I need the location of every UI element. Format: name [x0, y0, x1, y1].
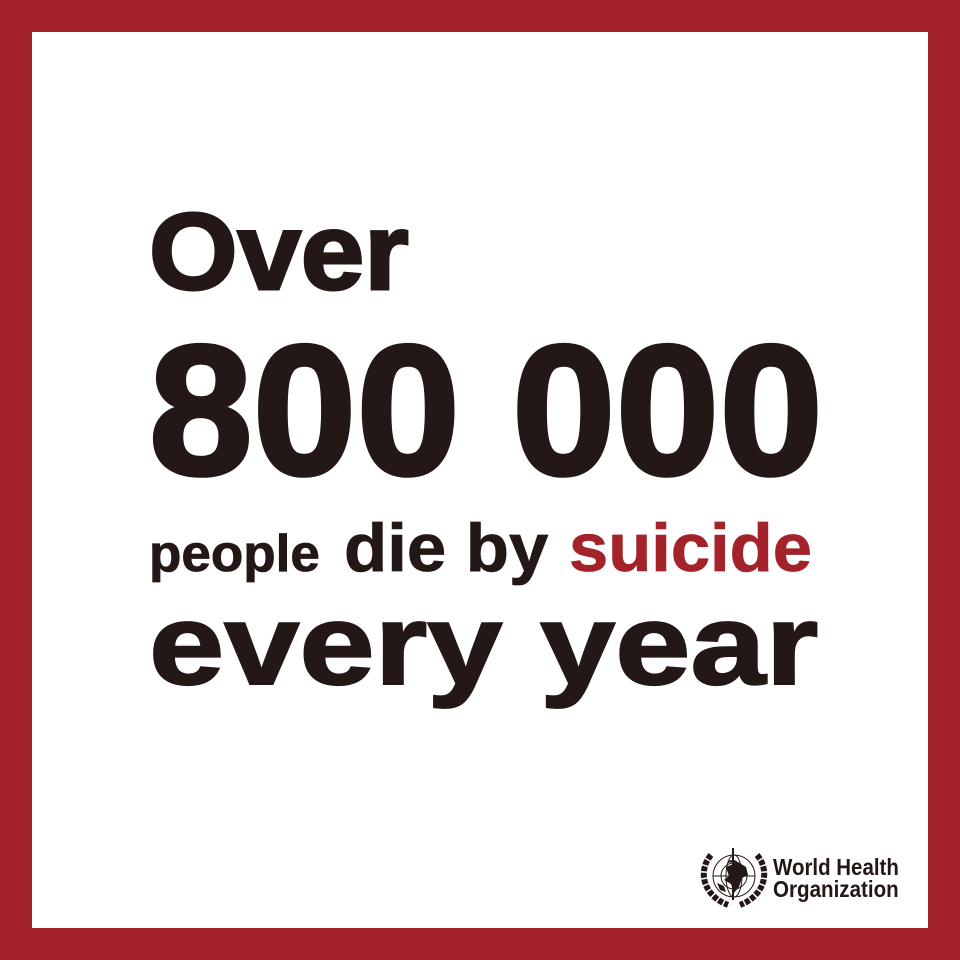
continents: [717, 862, 748, 893]
text: people: people: [149, 524, 320, 583]
statement line: every year: every year: [149, 580, 818, 709]
heading: Over: Over: [149, 190, 409, 312]
icon: WHO emblem: [704, 848, 764, 905]
text: suicide highlighted: suicide: [569, 509, 812, 586]
text: die by: die by: [344, 509, 549, 586]
laurel wreath: [704, 855, 764, 905]
logo: World Health Organization: [704, 848, 899, 905]
staff and serpent: [728, 848, 739, 900]
big number: 800 000: 800 000: [149, 308, 823, 514]
globe: [713, 855, 755, 897]
logo text: Organization: Organization: [773, 876, 899, 902]
statement line: people die by suicide: [149, 509, 812, 586]
logo text: World Health: World Health: [773, 854, 899, 880]
